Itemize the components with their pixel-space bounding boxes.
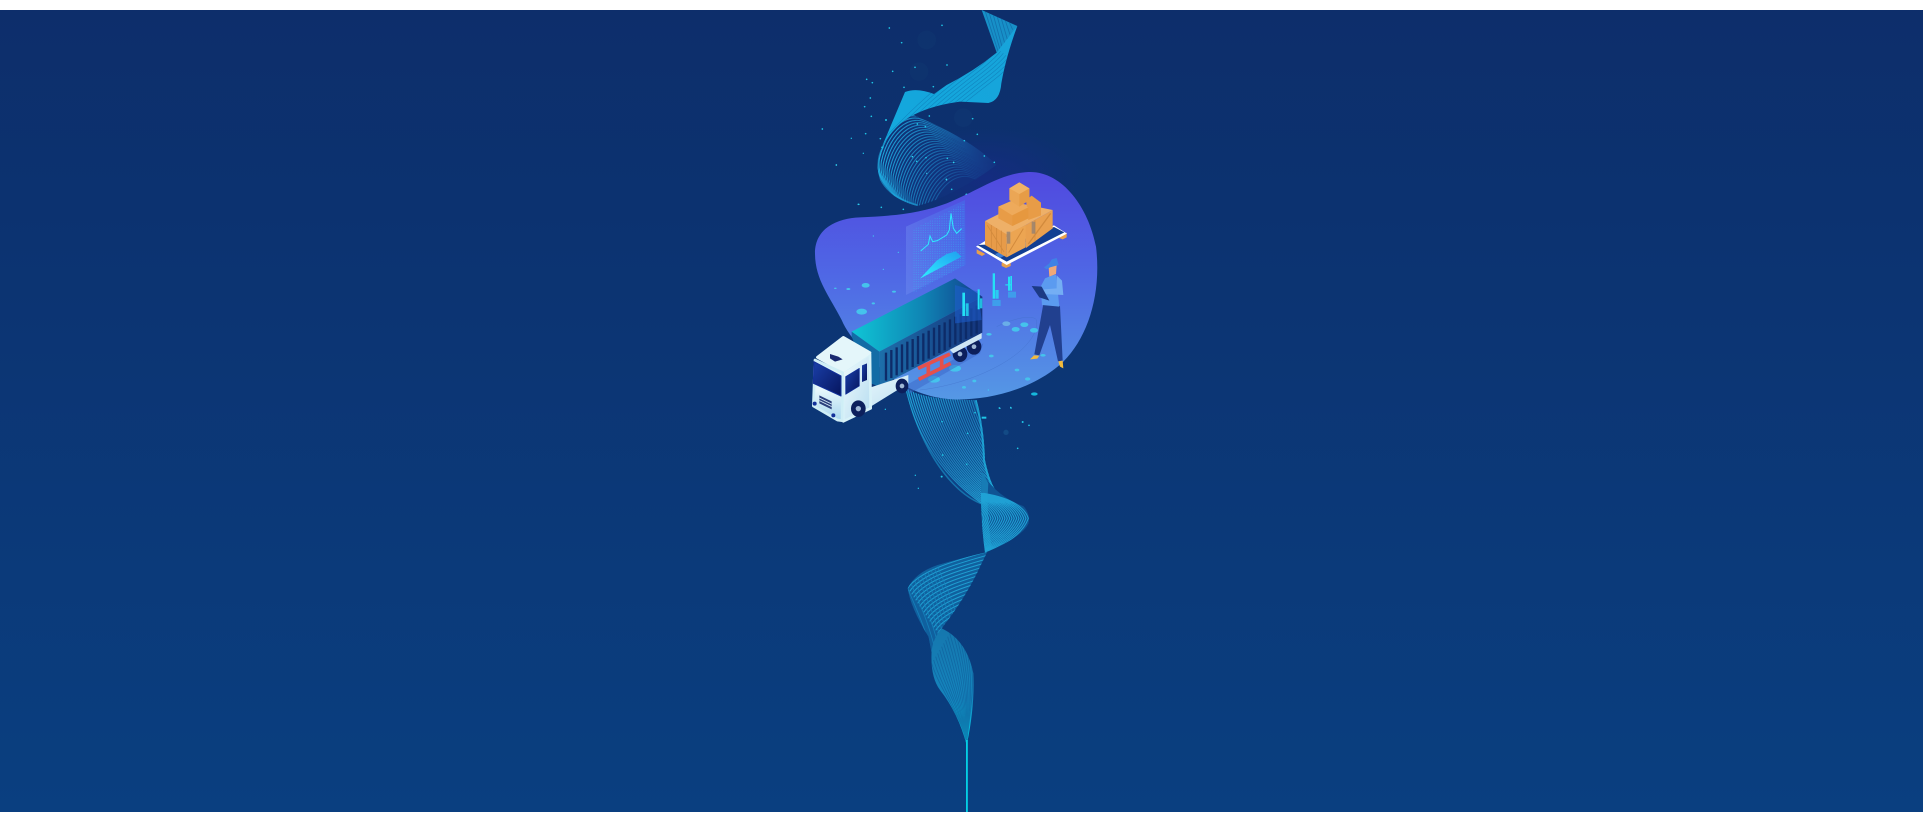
worker [1030,258,1063,368]
crate top [985,203,1053,235]
grille [819,395,832,409]
container ribs [886,306,977,381]
pallet feet [977,233,1067,268]
ground arc [920,317,1037,390]
top box [1009,182,1029,207]
truck shadow [903,343,983,393]
worker cap [1044,258,1059,269]
worker head [1049,265,1057,277]
pallet and boxes [976,182,1067,268]
worker legs [1034,304,1063,361]
lower ribbon [885,387,1057,812]
worker arm [1043,275,1063,295]
clipboard [1032,286,1049,301]
middle box [998,199,1028,226]
front wheels [851,379,908,417]
upper ribbon [877,10,1049,247]
blob background [815,172,1097,399]
headlights [813,402,835,417]
line chart [921,213,962,251]
lower particles [885,407,1030,489]
cab front [813,360,843,421]
rear wheels [953,339,981,362]
cab side [843,354,871,421]
ground ellipses [834,283,1046,396]
red landing frame [918,354,951,379]
ribbon bottom taper [931,628,974,745]
worker torso [1041,275,1059,307]
ribbon bright band [882,26,1018,146]
scene particles [836,156,1011,409]
container rear overlay [955,285,982,323]
ribbon right loop [981,470,1029,552]
roof vent [830,354,843,362]
trailer chassis [947,328,982,353]
ribbon section under truck [906,389,995,504]
right small box [1026,196,1041,220]
upper particles [821,24,978,210]
container top [852,278,982,352]
tractor chassis [843,375,908,422]
ribbon top flap [982,10,1017,53]
chart panel [906,200,966,295]
container left end [852,332,879,387]
side windows [846,368,859,394]
worker shoes [1030,355,1039,359]
container side [879,297,982,387]
right crate [1025,210,1053,248]
area chart [920,251,962,279]
cab roof [817,337,870,371]
particles over upper ribbon [881,115,995,195]
pallet [976,225,1067,265]
overlay bars [962,289,982,316]
ribbon tail line [966,740,968,812]
windshield [813,362,841,396]
main scene [813,156,1097,422]
truck [813,278,983,422]
left crate [985,221,1007,257]
bar indicators [992,273,1016,306]
ribbon lower lobe [878,115,992,206]
ribbon left loop [908,552,988,652]
faint background glow [890,128,1080,228]
